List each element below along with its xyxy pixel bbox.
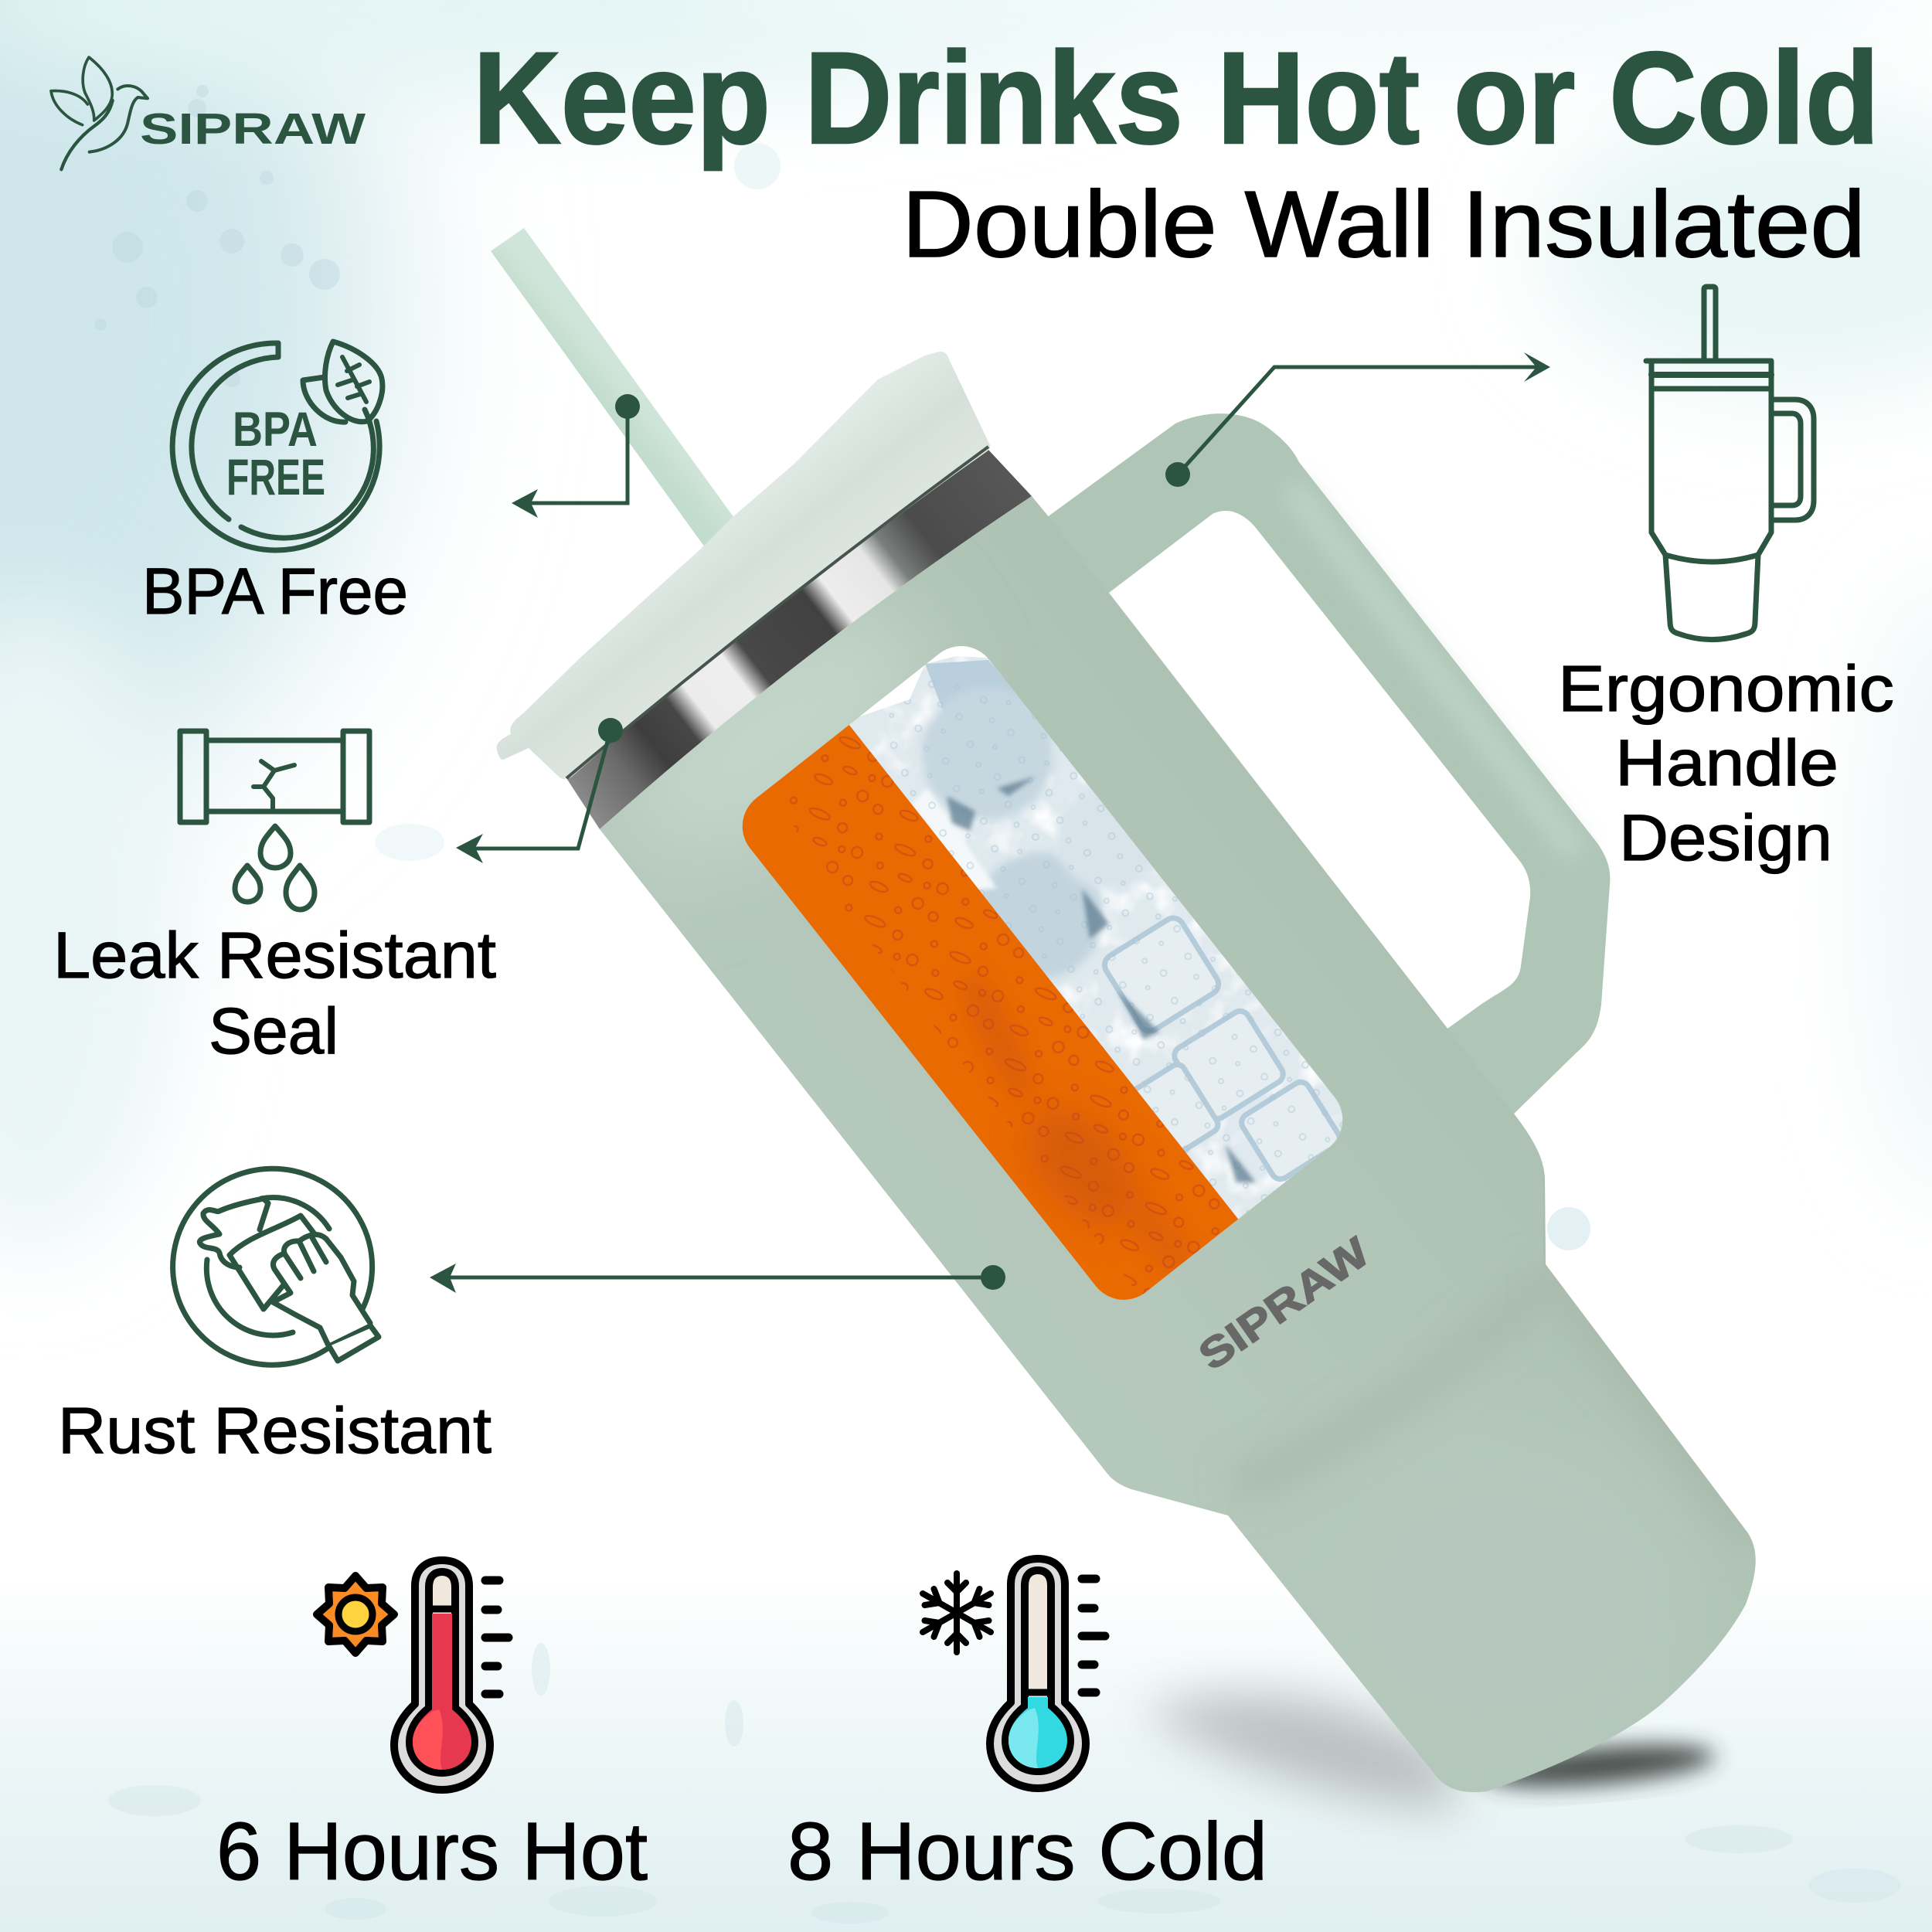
label: BPA Free [142, 555, 408, 628]
icon: bird [51, 57, 148, 169]
metal ring [566, 450, 1032, 829]
white corner of window [859, 646, 988, 716]
icon: BPA free badge: FREE [226, 448, 325, 505]
icon: hand wiping plate [173, 1168, 379, 1365]
label: 6 Hours Hot [216, 1806, 648, 1897]
icon: sun [317, 1576, 394, 1653]
label: 8 Hours Cold [787, 1806, 1267, 1897]
callout arrow: rust [430, 1264, 1005, 1293]
stat: 8 hours cold [787, 1559, 1267, 1897]
icon: snowflake [923, 1573, 991, 1652]
drink window [742, 646, 1343, 1300]
icon: hot thermometer [394, 1560, 509, 1790]
subtitle: Double Wall Insulated [902, 172, 1866, 277]
label line 2: Handle [1615, 726, 1838, 799]
orange half [696, 724, 1240, 1329]
label line 2: Seal [209, 995, 338, 1067]
feature: BPA free [142, 342, 408, 628]
label: Leak Resistant [53, 919, 496, 992]
tumbler ground shadow [1144, 1693, 1717, 1808]
label line 3: Design [1619, 801, 1832, 874]
lid [496, 352, 990, 779]
callout arrow: handle [1165, 352, 1550, 487]
feature: ergonomic handle [1558, 287, 1894, 874]
ice half [773, 646, 1343, 1298]
tumbler product illustration [491, 228, 1756, 1792]
label: Ergonomic [1558, 652, 1894, 725]
icon: tumbler outline [1646, 287, 1814, 640]
icon: BPA free badge: BPA [233, 403, 318, 457]
logo wordmark: SIPRAW [140, 104, 366, 154]
handle [1036, 413, 1610, 1121]
feature: leak resistant seal [53, 731, 496, 1067]
label: Rust Resistant [58, 1394, 492, 1467]
icon: BPA free badge [172, 342, 383, 550]
icon: cold thermometer [990, 1559, 1105, 1788]
tumbler logo: SIPRAW [1190, 1229, 1378, 1379]
icon: cracked pipe with drops [180, 731, 369, 910]
callout arrow: seal [456, 718, 623, 863]
straw [491, 228, 734, 547]
callout arrow: straw [512, 394, 640, 518]
feature: rust resistant [58, 1168, 492, 1467]
tumbler body [579, 496, 1756, 1792]
stat: 6 hours hot [216, 1560, 648, 1897]
logo: SIPRAW [51, 57, 366, 169]
